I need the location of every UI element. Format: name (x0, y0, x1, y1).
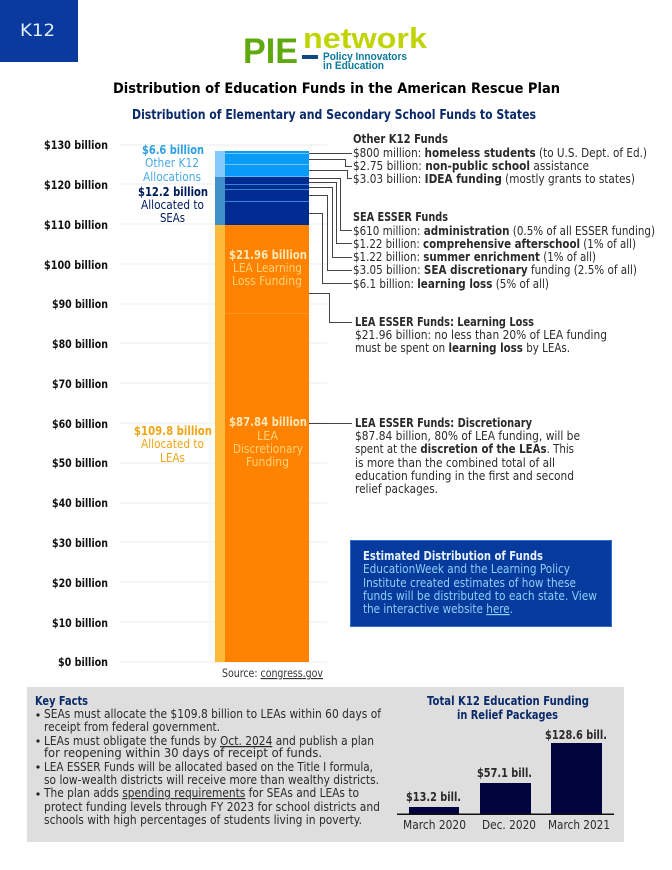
text block: SEA ESSER funds: $1.22 billion: summer enrichment (1% of all) (353, 250, 596, 264)
bar label: learning loss (229, 248, 307, 288)
y axis labels: $120 billion (44, 178, 108, 192)
callout: estimated distribution: the interactive website here. (363, 602, 513, 616)
bar label: learning loss: Loss Funding (232, 274, 302, 288)
logo: PIE network (243, 23, 428, 72)
left label: other K12 allocations: Allocations (143, 170, 201, 184)
logo: PIE network: Policy Innovators (323, 51, 407, 63)
text block: LEA learning loss (355, 315, 607, 355)
text block: LEA learning loss: $21.96 billion: no less than 20% of LEA funding (355, 328, 607, 342)
title: Distribution of Education Funds in the American Rescue Plan (113, 81, 560, 97)
left label: allocated to LEAs (134, 424, 212, 465)
text block: LEA discretionary: $87.84 billion, 80% of LEA funding, will be (355, 429, 580, 443)
text block: LEA discretionary (355, 416, 580, 496)
panel: key facts: receipt from federal government. (44, 720, 220, 734)
text block: LEA discretionary: LEA ESSER Funds: Discretionary (355, 416, 532, 430)
text block: LEA discretionary: education funding in the first and second (355, 469, 574, 483)
panel: key facts: LEAs must obligate the funds by Oct. 2024 and publish a plan (44, 734, 374, 748)
text block: LEA discretionary: spent at the discretion of the LEAs. This (355, 442, 574, 456)
y axis labels: $10 billion (52, 616, 108, 630)
y axis labels (44, 138, 108, 669)
text block: SEA ESSER funds (353, 210, 655, 291)
panel: key facts: Key Facts (35, 694, 88, 708)
y axis labels: $110 billion (44, 218, 108, 232)
panel: key facts: SEAs must allocate the $109.8 billion to LEAs within 60 days of (44, 707, 382, 721)
y axis labels: $20 billion (52, 576, 108, 590)
left label: allocated to LEAs: $109.8 billion (134, 424, 212, 438)
callout: estimated distribution: Institute created estimates of how these (363, 576, 576, 590)
bar values (406, 728, 607, 804)
left label: other K12 allocations (142, 143, 204, 184)
y axis labels: $100 billion (44, 258, 108, 272)
bar chart: total K12 funding in relief packages (397, 694, 614, 832)
text block: other K12 funds (353, 132, 647, 186)
bar values: $13.2 bill. (406, 790, 461, 804)
text block: other K12 funds: $2.75 billion: non-public school assistance (353, 159, 589, 173)
y axis labels: $130 billion (44, 138, 108, 152)
callout: estimated distribution (350, 540, 612, 626)
left label: allocated to SEAs (138, 185, 208, 225)
y axis labels: $40 billion (52, 496, 108, 510)
panel: key facts: so low-wealth districts will receive more than wealthy districts. (44, 773, 379, 787)
left label: allocated to SEAs: Allocated to (141, 198, 204, 212)
left label: other K12 allocations: Other K12 (145, 156, 199, 170)
chart title (427, 694, 589, 722)
panel: key facts: LEA ESSER Funds will be allocated based on the Title I formula, (44, 760, 373, 774)
connector lines (309, 154, 352, 424)
y axis labels: $0 billion (58, 655, 108, 669)
y axis labels: $70 billion (52, 377, 108, 391)
text block: other K12 funds: Other K12 Funds (353, 132, 448, 146)
text block: SEA ESSER funds: $3.05 billion: SEA discretionary funding (2.5% of all) (353, 263, 637, 277)
bar label: discretionary: Discretionary (233, 442, 303, 456)
panel: key facts: The plan adds spending requirements for SEAs and LEAs to (43, 786, 359, 800)
bar dates: March 2021 (548, 818, 610, 832)
y axis labels: $60 billion (52, 417, 108, 431)
logo: PIE network: in Education (323, 60, 384, 72)
stacked bar (215, 151, 309, 662)
bar dates (403, 818, 610, 832)
chart title: in Relief Packages (457, 708, 558, 722)
bar label: discretionary: LEA (257, 429, 279, 443)
y axis labels: $50 billion (52, 456, 108, 470)
left label: allocated to LEAs: Allocated to (141, 437, 204, 451)
subtitle: Distribution of Elementary and Secondary School Funds to States (132, 108, 536, 123)
y axis labels: $30 billion (52, 536, 108, 550)
bar dates: March 2020 (403, 818, 466, 832)
bar dates: Dec. 2020 (482, 818, 536, 832)
text block: SEA ESSER funds: $1.22 billion: comprehensive afterschool (1% of all) (353, 237, 636, 251)
panel: key facts: schools with high percentages of students living in poverty. (44, 813, 362, 827)
chart gridlines (120, 145, 327, 662)
logo: PIE network: PIE (243, 32, 298, 71)
text block: LEA learning loss: LEA ESSER Funds: Learning Loss (355, 315, 534, 329)
callout: estimated distribution: EducationWeek and the Learning Policy (363, 562, 570, 576)
y axis labels: $80 billion (52, 337, 108, 351)
bar label: learning loss: LEA Learning (233, 261, 302, 275)
text block: LEA learning loss: must be spent on learning loss by LEAs. (355, 341, 570, 355)
left label: allocated to SEAs: SEAs (160, 211, 185, 225)
panel: key facts (35, 694, 382, 827)
logo: PIE network: network (303, 23, 428, 55)
left label: other K12 allocations: $6.6 billion (142, 143, 204, 157)
panel: key facts: for reopening within 30 days of receipt of funds. (44, 746, 322, 760)
text block: SEA ESSER funds: $6.1 billion: learning loss (5% of all) (353, 277, 549, 291)
left label: allocated to LEAs: LEAs (160, 451, 185, 465)
panel: bottom background (27, 687, 624, 842)
bar label: discretionary: Funding (246, 455, 289, 469)
text block: other K12 funds: $3.03 billion: IDEA funding (mostly grants to states) (353, 172, 635, 186)
left label: allocated to SEAs: $12.2 billion (138, 185, 208, 199)
K12 badge (0, 0, 78, 62)
text block: LEA discretionary: relief packages. (355, 482, 438, 496)
K12 badge: K12 (20, 21, 55, 41)
y axis labels: $90 billion (52, 297, 108, 311)
callout: estimated distribution: Estimated Distribution of Funds (363, 549, 543, 563)
text block: LEA discretionary: is more than the combined total of all (355, 456, 555, 470)
callout: estimated distribution: funds will be distributed to each state. View (363, 589, 597, 603)
text block: SEA ESSER funds: $610 million: administration (0.5% of all ESSER funding) (353, 224, 655, 238)
text block: SEA ESSER funds: SEA ESSER Funds (353, 210, 448, 224)
bars (397, 743, 614, 815)
bar label: discretionary: $87.84 billion (229, 415, 307, 429)
panel: key facts: protect funding levels through FY 2023 for school districts and (44, 800, 380, 814)
source note: Source: congress.gov (222, 666, 323, 680)
text block: other K12 funds: $800 million: homeless students (to U.S. Dept. of Ed.) (353, 146, 647, 160)
chart title: Total K12 Education Funding (427, 694, 589, 708)
bar values: $57.1 bill. (477, 766, 532, 780)
bar values: $128.6 bill. (545, 728, 607, 742)
bar label: discretionary (229, 415, 307, 469)
bar label: learning loss: $21.96 billion (229, 248, 307, 262)
